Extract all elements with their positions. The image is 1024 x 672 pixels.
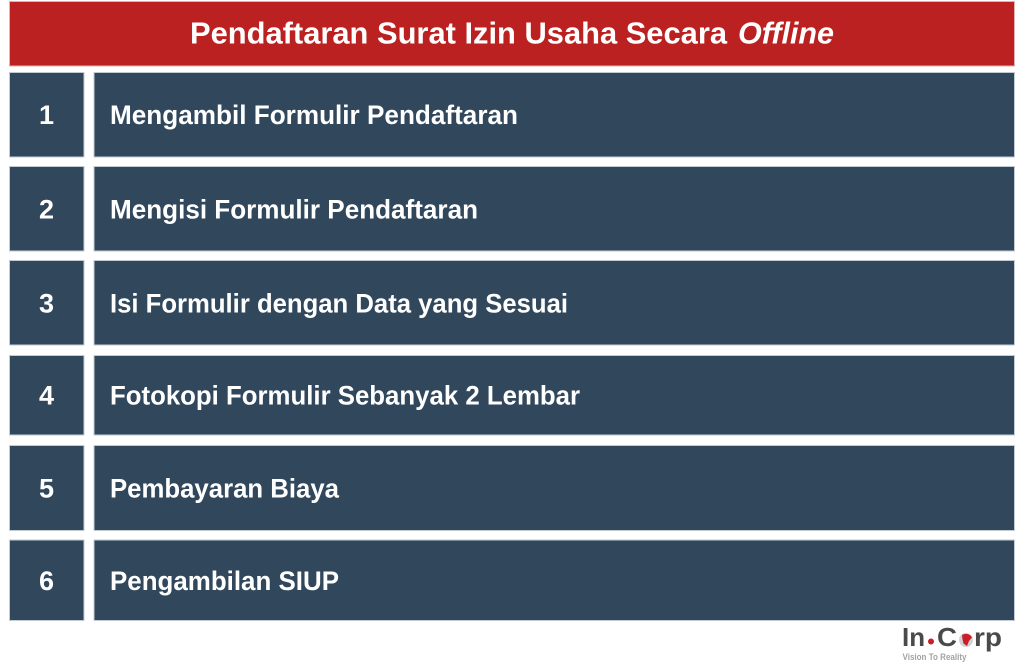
step 4 row [10, 356, 1014, 435]
step 6 row: Pengambilan SIUP [110, 566, 339, 596]
icon: globe [959, 633, 973, 647]
step 5 row: 5 [39, 474, 54, 504]
step 4 row: Fotokopi Formulir Sebanyak 2 Lembar [110, 380, 580, 410]
step 4 row: 4 [39, 380, 54, 410]
step 1 row: Mengambil Formulir Pendaftaran [110, 100, 518, 130]
step 6 row [10, 540, 1014, 620]
step 2 row [10, 166, 1014, 251]
logo: InCorp: C [937, 622, 957, 652]
logo: InCorp: rp [974, 622, 1002, 652]
logo: InCorp: In [902, 622, 925, 652]
title banner [10, 2, 1014, 66]
step 3 row [10, 260, 1014, 345]
step 1 row [10, 72, 1014, 157]
step 3 row: Isi Formulir dengan Data yang Sesuai [110, 288, 568, 318]
step 1 row: 1 [39, 100, 54, 130]
logo: InCorp: Vision To Reality [902, 652, 966, 662]
logo: InCorp [902, 622, 1002, 662]
title text: Offline [738, 16, 834, 50]
title text: Pendaftaran Surat Izin Usaha Secara [190, 16, 728, 50]
step 2 row: 2 [39, 194, 54, 224]
step 5 row: Pembayaran Biaya [110, 474, 340, 504]
step 6 row: 6 [39, 566, 54, 596]
step 5 row [10, 446, 1014, 530]
step 3 row: 3 [39, 288, 54, 318]
step 2 row: Mengisi Formulir Pendaftaran [110, 194, 478, 224]
